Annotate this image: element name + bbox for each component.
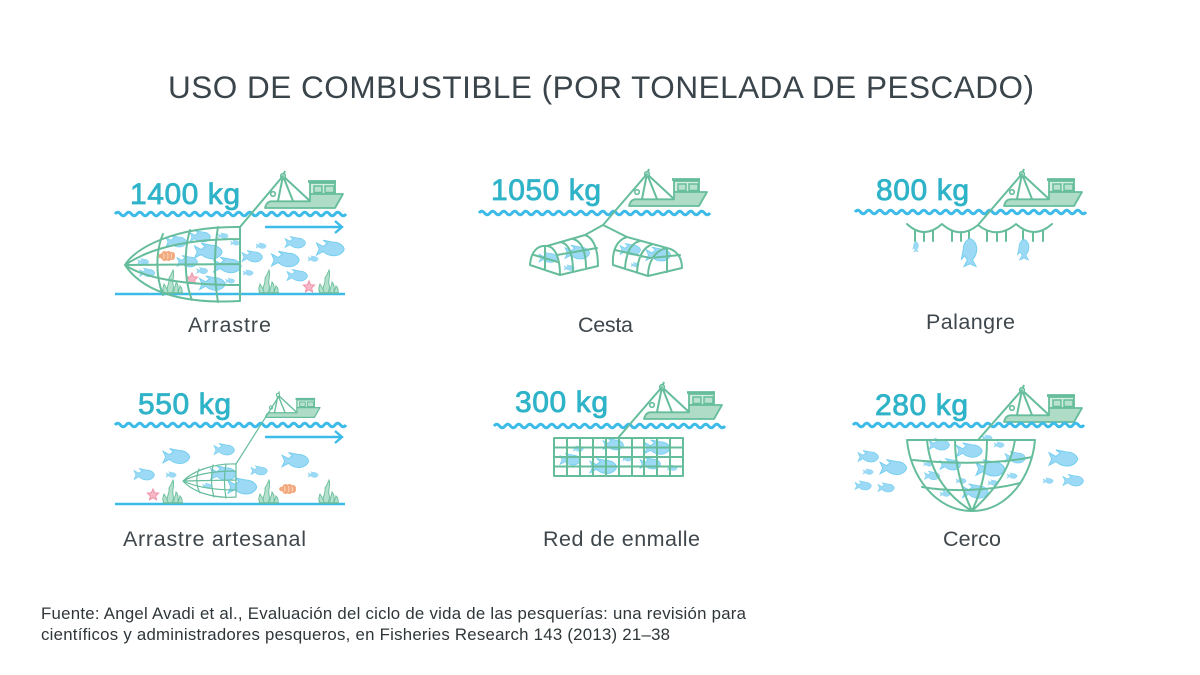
value: 1400 kg: 1400 kg [130,178,240,211]
small trawl net [183,396,279,498]
icon: small fishing boat [265,392,320,417]
panel: Arrastre artesanal [115,388,346,551]
source note [41,604,747,644]
water surface [855,210,1086,214]
panel: Palangre [855,169,1086,334]
value: 1050 kg: 1050 kg [491,174,601,207]
panel: Arrastre [115,171,346,337]
source note: científicos y administradores pesqueros, en Fisheries Research 143 (2013) 21–38 [41,625,670,644]
label: Arrastre [188,313,271,337]
seaweed, starfish and clownfish [147,480,339,503]
direction arrow [265,431,342,443]
water surface [115,212,346,216]
title: USO DE COMBUSTIBLE (POR TONELADA DE PESCADO) [168,69,1034,105]
label: Palangre [926,310,1015,334]
hooked fish [913,239,1029,266]
purse seine net [907,390,1035,511]
source note: Fuente: Angel Avadi et al., Evaluación del ciclo de vida de las pesquerías: una revisión para [41,604,747,623]
panel: Cesta [479,169,710,337]
value: 550 kg: 550 kg [138,388,231,421]
label: Cerco [943,527,1001,551]
water surface [115,423,346,427]
trawl net [125,176,283,302]
value: 280 kg: 280 kg [875,389,968,422]
basket traps and lines [530,174,682,276]
icon: fishing boat [1004,169,1082,206]
seaweed, starfish and clownfish [158,251,339,293]
water surface [479,211,710,215]
fish school [138,230,344,290]
fish in traps [539,244,671,270]
label: Red de enmalle [543,527,700,551]
label: Arrastre artesanal [123,527,306,551]
sea floor [115,293,345,295]
fish caught in net [560,438,677,474]
direction arrow [265,221,342,233]
icon: fishing boat [1004,385,1082,422]
icon: fishing boat [644,382,722,419]
panel: Cerco [853,385,1084,551]
label: Cesta [578,313,633,337]
sea floor [115,503,345,505]
value: 300 kg: 300 kg [515,386,608,419]
value: 800 kg: 800 kg [876,174,969,207]
longline [907,174,1052,241]
water surface [494,424,725,428]
panel: Red de enmalle [494,382,725,551]
icon: fishing boat [629,169,707,206]
fish school [855,435,1084,498]
icon: fishing boat [265,171,343,208]
fish school [134,444,318,494]
water surface [853,423,1084,427]
gill net grid [554,387,683,476]
